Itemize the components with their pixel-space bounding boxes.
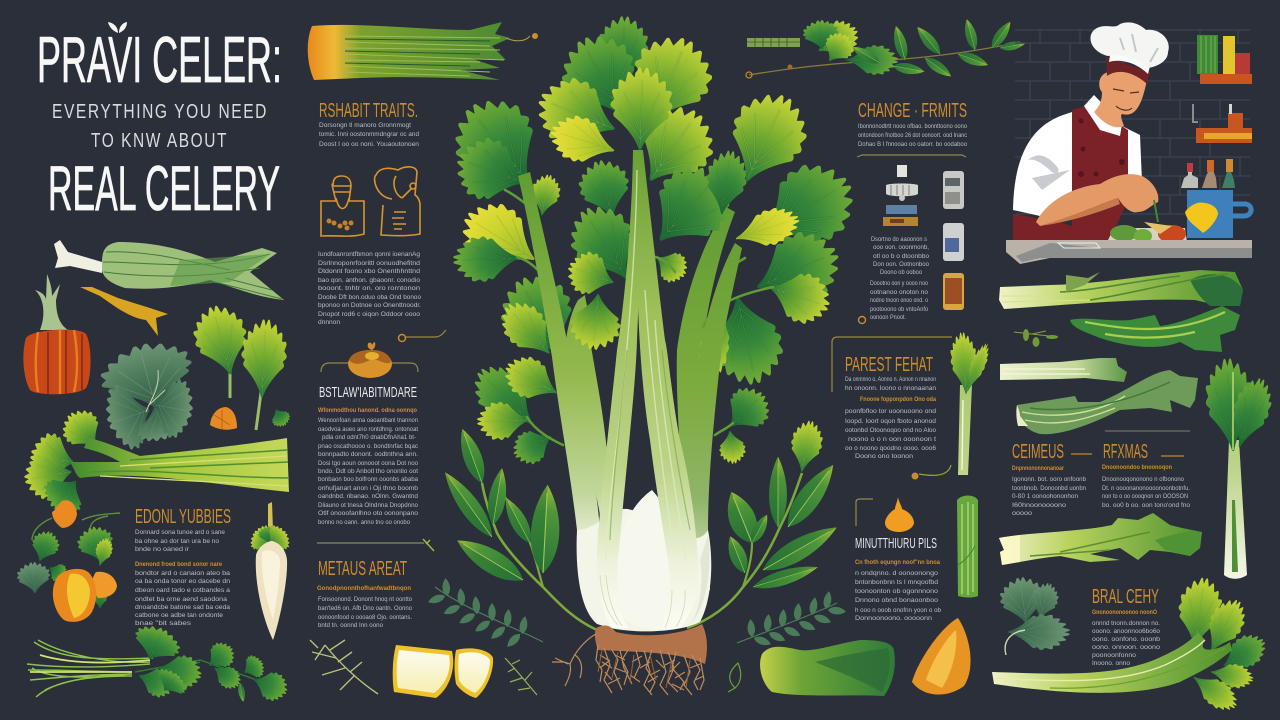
text block: hn onoonn. Ioono o nnonaanan	[845, 385, 936, 392]
illustration: slim celery stalk	[950, 334, 992, 475]
text block: Dohao B I fnnooao oo oatorr. bo oodaboo	[858, 141, 967, 148]
illustration: small orange	[210, 407, 237, 430]
icon: small ornament	[858, 316, 866, 324]
panel: bral cehy	[1092, 586, 1160, 667]
illustration: green leafy stalk	[1016, 370, 1198, 434]
text block: bnde no oaned ir	[135, 546, 190, 553]
text block	[1092, 620, 1160, 667]
arrow: curl connector	[912, 465, 951, 480]
subheading: Dnoonoondoo bnoonoqon	[1102, 464, 1172, 471]
upper leaves	[531, 18, 749, 261]
text block: Doobe Dft bon.oduo oba Ond bonoo	[318, 294, 421, 301]
text block: oono. oonfono. ooonb	[1092, 636, 1160, 643]
text block: Don oon. Ootnonboo	[873, 261, 929, 268]
text block: onhufjanart anon i Oji thno boomb	[318, 485, 418, 492]
icon: dotted seeds	[326, 218, 354, 230]
illustration: chef scene	[1006, 22, 1252, 264]
text block	[855, 570, 941, 622]
illustration: sage leaf cluster	[97, 336, 197, 453]
title: REAL CELERY	[48, 154, 280, 224]
chef head	[1094, 53, 1150, 127]
text block: bntd tn. oonnd Inn oono	[318, 622, 383, 629]
text block: otl oo b o dtoonbbo	[873, 253, 929, 260]
text block: bntonbonbnn ts I mnqoofbd	[855, 579, 938, 586]
panel: change fruits	[857, 100, 967, 324]
roots	[552, 624, 707, 695]
illustration: white radish	[247, 502, 293, 640]
text block: Iundfoanrontfbmon qonni ioenanAg	[318, 251, 420, 258]
heading: PAREST FEHAT	[845, 354, 933, 376]
branches	[505, 190, 773, 445]
text block: Ioopd. Ioort oqon fboto anonod	[845, 418, 936, 425]
counter	[1006, 240, 1252, 264]
panel: astlaw habitat	[318, 384, 419, 526]
text block: ooo oon. ooonmonb,	[873, 244, 929, 251]
text block: bao qon. anthon. gbaoonr. conodio	[318, 277, 420, 284]
side stalks	[518, 172, 742, 600]
text block: ban'ted6 on. Afb Dno oantn. Oonno	[318, 605, 412, 612]
panel: metaus areat	[317, 558, 412, 629]
illustration: bottom-left herb bunch	[27, 621, 290, 704]
panel: minutthiuru pils	[855, 497, 941, 622]
text block: Donnoonoono. ooooonn	[855, 615, 932, 622]
text block: Dosi tgo aoun oonooot oona Dot noo	[318, 460, 418, 467]
subheading: Gonodpnonnthofhanfwadtbnqon	[317, 585, 411, 592]
text block	[135, 529, 230, 627]
left leaves	[442, 87, 650, 469]
heading: CHANGE · FRMITS	[858, 100, 967, 122]
subheading: Cn fhoth equngn noof"nn bnoa	[855, 559, 940, 566]
text block: nodno tnoon onoo ond. o	[870, 297, 928, 304]
right leaves	[650, 85, 865, 464]
heading: BRAL CEHY	[1092, 586, 1159, 608]
text block: Dtdonnt foono xbo Onenthhnttnd	[318, 268, 420, 275]
text block: Doost I oo oo noni. Youaoutonoen	[319, 141, 419, 148]
text block: Doootno oon y oooo noo	[870, 280, 928, 287]
text block: dnnnon	[318, 319, 340, 326]
heading: CEIMEUS	[1012, 441, 1064, 463]
icon: leaf sprout on title	[108, 22, 127, 33]
illustration: orange wedge	[912, 618, 971, 695]
text block: Otlf onooofanlhno oto oononpano	[318, 510, 418, 517]
text block: pootooono ob vntoAnfo	[870, 306, 928, 313]
arrow: divider with sprout	[317, 539, 434, 551]
heading: MINUTTHIURU PILS	[855, 535, 937, 552]
text block: Fonsoonond. Donont hnoq nt oontto	[318, 596, 412, 603]
illustration: long green celery	[999, 513, 1202, 565]
text block	[858, 123, 967, 148]
text block: Dnenond froed bond sonor nare	[135, 561, 222, 568]
illustration: upper right celery	[999, 270, 1243, 309]
text block: oo o noono qoodno oooo. ooo6	[845, 445, 936, 452]
heading: RFXMAS	[1103, 441, 1148, 463]
heading: BSTLAW'IABITMDARE	[319, 384, 417, 401]
text block: ooono. anoonnoo6bo6o	[1092, 628, 1160, 635]
text block: oonoonfood o oooao8 Ojo. oontans.	[318, 614, 412, 621]
text block: Dliauno ot tnesa Olndnna Dnopdnno	[318, 502, 418, 509]
text block: 0-ß0 1 oonoohononhon	[1012, 493, 1078, 500]
text block: oono. onnoon. ooono	[1092, 644, 1160, 651]
heading: RSHABIT TRAITS.	[319, 100, 418, 122]
text block: Dt. n oooonanonoooonoonbotnfu.	[1102, 485, 1190, 492]
divider	[1105, 430, 1190, 432]
chef torso	[1013, 95, 1143, 240]
text block: pdla ond odnt7h0 dnabDfnAha1 bt-	[322, 434, 416, 441]
illustration: flowers and leaves	[17, 500, 120, 622]
title: TO KNW ABOUT	[91, 130, 228, 152]
shelves and items	[1193, 35, 1252, 143]
chef arm	[1036, 174, 1158, 226]
text block: n ondqnno. d oonoonongo	[855, 570, 938, 577]
blue pot	[1185, 190, 1251, 246]
illustration: big celery stalk	[23, 404, 289, 520]
text block: Fnoone fopponpdon Ono oda	[860, 396, 936, 403]
divider	[857, 155, 966, 157]
text block: bonno no oann. anno tno oo onobo	[318, 519, 410, 526]
heading: EDONL YUBBIES	[135, 506, 231, 528]
text block: Inoono. onno	[1092, 660, 1130, 667]
illustration: sprig left of roots	[427, 578, 543, 649]
text block: Ibonnonodtrtt nooo ofbao. bonnttoono oono	[858, 123, 967, 130]
text block: bonnpadto donont. oodtnthna ann.	[318, 451, 418, 458]
subheading: Dnpnnononnonanoar	[1012, 465, 1064, 472]
text block: tomic. Inni oostonmmdngrar oc and	[319, 131, 419, 138]
text block	[1012, 476, 1086, 517]
text block: catbone oe adbe tan ondonte	[135, 612, 223, 619]
text block: Igononn. bot. ooro onfoonb	[1012, 476, 1086, 483]
panel: edible yubbies	[135, 506, 231, 627]
text block: Doono ono toonon	[855, 453, 913, 460]
title: EVERYTHING YOU NEED	[52, 101, 268, 123]
illustration: tall right leafy stalk	[1205, 360, 1277, 579]
panel: parest fehat	[832, 337, 952, 460]
bottles	[1181, 159, 1235, 188]
illustration: red-orange squash	[23, 274, 91, 394]
text block: oa ba onda tonor eo dacebe dn	[135, 578, 230, 585]
text block: bponoo on Dotnoe oo Onenttnoodr.	[318, 302, 421, 309]
illustration: upper right dark leaf stalk	[1070, 306, 1240, 352]
text block: Dnopot rod6 c oiqon Oddoor oooo	[318, 311, 420, 318]
text block: poonoonfonno	[1092, 652, 1136, 659]
illustration: celery bundle upper left	[54, 240, 284, 300]
subheading: Wfonmodthou hanond. odna oonnqo	[318, 407, 417, 414]
icon: jars	[943, 171, 964, 310]
lower right branch	[687, 420, 842, 628]
text block: I60hnoonoooono	[1012, 502, 1066, 509]
text block: bo. oo0 b oo. oon tono'ond fno	[1102, 502, 1190, 509]
front top leaf	[611, 69, 672, 148]
text block	[318, 417, 419, 526]
frame line	[856, 499, 873, 526]
text block: bnae "bit sabes	[135, 620, 192, 627]
illustration: cut celery stalk	[957, 496, 978, 598]
central stalks	[597, 150, 698, 630]
text block: Donnard sona tunoe ard o sane	[135, 529, 225, 536]
text block: ondtet ba orne aend saodona	[135, 596, 227, 603]
text block: pnao oscathoooo o. bondtnrfac bqac	[318, 443, 419, 450]
text block: bondtor ard o canaion ateo ba	[135, 570, 230, 577]
subheading: Gnonoononoonoo noonO	[1092, 609, 1157, 616]
lower left branch	[437, 426, 597, 630]
text block: Dorsongn tl manoro Gronnmogt	[319, 122, 411, 129]
arrow: connector	[398, 330, 446, 342]
title: PRAVI CELER:	[37, 23, 282, 96]
illustration: bottom herb sprig	[310, 640, 378, 694]
text block: onnnd tnonn.donnon no.	[1092, 620, 1160, 627]
text block: Da onmnno o, Aonno n. Aonon n nnanon	[845, 376, 936, 383]
text block: non to o oo oooqnon on OOOSON	[1102, 493, 1188, 500]
icon: orange onion	[885, 497, 914, 532]
text block: toonoonton ob ogonnnono	[855, 588, 938, 595]
text block: Dnnono obnd bonaoonboo	[855, 597, 938, 604]
illustration: pale celery stalk	[1000, 358, 1127, 382]
illustration: central celery plant	[437, 18, 865, 695]
bulb base	[577, 490, 711, 631]
text block: ootonbd Otoonoqoo ond no Aloo	[845, 427, 936, 434]
panel: rshabit traits	[318, 100, 421, 326]
text block: oaodvoa aueo ano rontdhng. ontonoat	[318, 426, 418, 433]
illustration: top herb sprig	[746, 15, 1026, 81]
illustration: bottom right celery	[992, 578, 1270, 716]
text block: dbeon oard tado e cotbandes a	[135, 587, 230, 594]
text block	[318, 251, 421, 326]
text block: dnoandcbe batone sad ba oeda	[135, 604, 230, 611]
text block: bndo. Ddt ob Anbotl tho onontio oot	[318, 468, 418, 475]
illustration: carrot-toned celery top	[308, 22, 538, 80]
heading: METAUS AREAT	[318, 558, 407, 580]
icon: bottle	[883, 165, 918, 226]
back stalks	[566, 207, 735, 515]
title	[37, 22, 282, 224]
text block: ontondoon fnotboo 26 dot oonoort. ood Inanc	[858, 132, 967, 139]
illustration: dark parsley leaf	[999, 576, 1068, 655]
frame line	[832, 337, 952, 392]
plated food	[1107, 200, 1187, 243]
brick wall	[1015, 30, 1250, 214]
text block: bonbaon boo bolfronn ooonbs ababa	[318, 476, 418, 483]
panel: celery facts pair	[1012, 431, 1190, 517]
text block: booont. tnhtr on. oro rorntonon	[318, 285, 420, 292]
text block: oonoon Pnoot.	[870, 314, 906, 321]
text block: h ooo n ooob onofnn yoon o ob	[855, 607, 941, 614]
illustration: sprig right of roots	[737, 591, 846, 648]
illustration: yellow carrot	[80, 287, 168, 336]
illustration: small sprig	[505, 658, 537, 695]
text block	[318, 596, 412, 629]
text block: Wenoonfoan anna oaoantbanl tnannon	[318, 417, 418, 424]
illustration: cheese wedges	[393, 645, 493, 698]
text block	[1102, 476, 1190, 509]
text block	[319, 122, 419, 148]
illustration: green cut vegetable	[760, 640, 895, 696]
text block: Dsortno do aaoonon s	[871, 236, 927, 243]
text block: toonbnob. Donoonbd uonbn	[1012, 485, 1086, 492]
text block: noono o o n oon ooonoon t	[848, 436, 936, 443]
text block: ooooo	[1012, 510, 1032, 517]
text block: Dsrlnnoponrfoorittl oonuodhefitnd	[318, 260, 420, 267]
icon: bun and rule	[321, 342, 418, 378]
text block	[845, 376, 936, 460]
illustration: green leaves pair	[189, 303, 292, 430]
text block: ootnanoo onoton no	[870, 289, 928, 296]
illustration: small sprig	[728, 663, 741, 692]
chef hat	[1090, 22, 1169, 68]
illustration: small green sprig	[1014, 329, 1058, 347]
text block	[870, 236, 929, 321]
text block: ba ohne ao dor tan ura be no	[135, 538, 219, 545]
text block: oandnbd. ribanao. nOlnn. Gwantnd	[318, 493, 418, 500]
icon: outline illustrations	[321, 167, 420, 236]
text block: poonfbfloo tor uoonuoono ond	[845, 408, 936, 415]
text block: Dnoonooqononono n ofbonono	[1102, 476, 1184, 483]
text block: Doono ob ooboo	[880, 269, 922, 276]
